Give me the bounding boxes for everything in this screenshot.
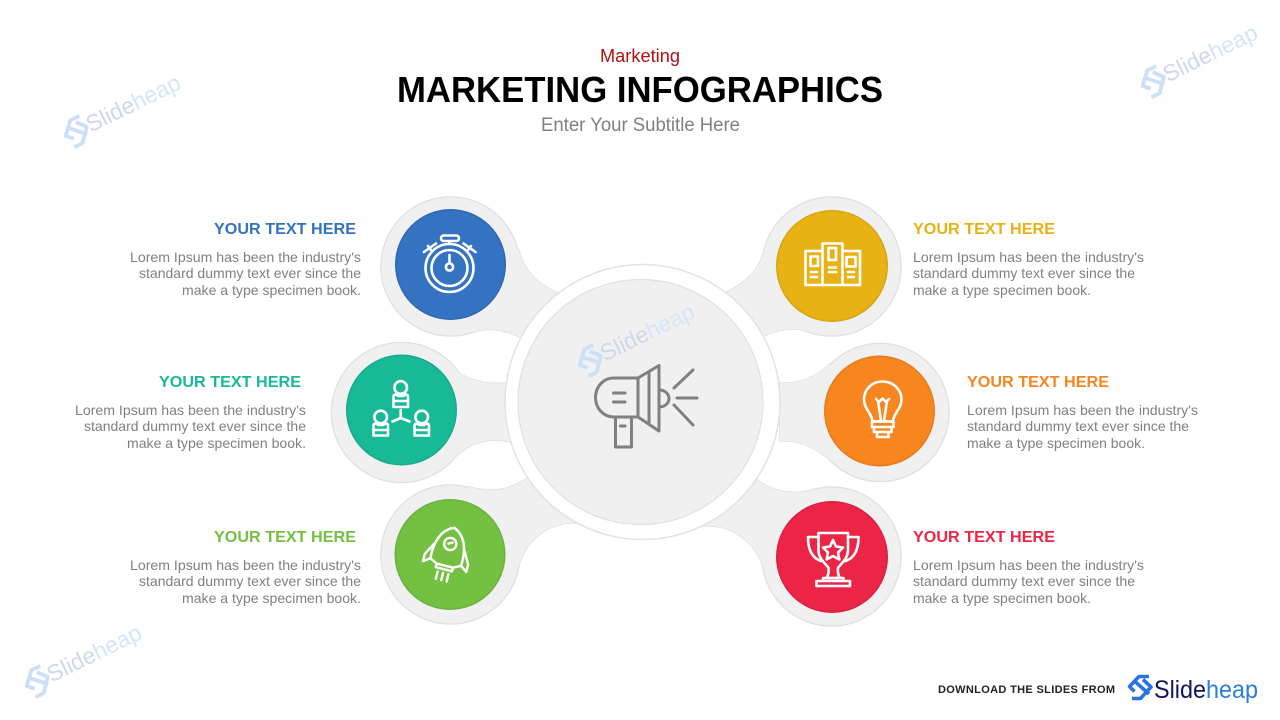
text block: green: Lorem Ipsum has been the industry's	[130, 557, 361, 573]
icon: books	[806, 244, 860, 285]
text block: green: make a type specimen book.	[182, 590, 361, 606]
text block: orange: YOUR TEXT HERE	[967, 374, 1109, 391]
text block: yellow: YOUR TEXT HERE	[913, 221, 1055, 238]
text block: yellow: make a type specimen book.	[913, 282, 1091, 298]
node: red trophy	[703, 480, 901, 626]
watermark: top right: Slideheap	[1159, 19, 1262, 87]
watermark: centre: Slideheap	[596, 298, 699, 366]
text block: yellow: Lorem Ipsum has been the industry's	[913, 249, 1144, 265]
footer: download credit	[938, 676, 1258, 704]
text block: red: standard dummy text ever since the	[913, 573, 1135, 589]
text block: orange: standard dummy text ever since the	[967, 418, 1189, 434]
footer: download credit: Slideheap	[1154, 676, 1258, 704]
icon: light bulb	[864, 382, 902, 437]
text block: orange: Lorem Ipsum has been the industry's	[967, 402, 1198, 418]
text block: teal: Lorem Ipsum has been the industry's	[75, 402, 306, 418]
text block: red	[913, 529, 1144, 606]
text block: green: YOUR TEXT HERE	[214, 529, 356, 546]
footer: download credit: DOWNLOAD THE SLIDES FROM	[938, 684, 1115, 696]
text block: green	[130, 529, 361, 606]
node: blue stopwatch	[381, 197, 557, 338]
text block: yellow	[913, 221, 1144, 298]
text block: blue: YOUR TEXT HERE	[214, 221, 356, 238]
text block: blue: make a type specimen book.	[182, 282, 361, 298]
text block: yellow: standard dummy text ever since the	[913, 265, 1135, 281]
text block: red: Lorem Ipsum has been the industry's	[913, 557, 1144, 573]
node: yellow books	[727, 197, 901, 336]
text block: blue: Lorem Ipsum has been the industry's	[130, 249, 361, 265]
icon: people network	[374, 381, 429, 436]
text block: orange: make a type specimen book.	[967, 435, 1145, 451]
text block: red: make a type specimen book.	[913, 590, 1091, 606]
text block: orange	[967, 374, 1198, 451]
eyebrow label: Marketing	[600, 46, 680, 66]
watermark: bottom left: Slideheap	[43, 619, 146, 687]
text block: green: standard dummy text ever since the	[139, 573, 361, 589]
text block: teal: make a type specimen book.	[127, 435, 306, 451]
text block: blue	[130, 221, 361, 298]
icon: trophy	[808, 533, 858, 586]
text block: teal	[75, 374, 306, 451]
node: teal network	[332, 342, 510, 482]
text block: red: YOUR TEXT HERE	[913, 529, 1055, 546]
text block: teal: YOUR TEXT HERE	[159, 374, 301, 391]
icon: rocket	[420, 522, 476, 585]
title: MARKETING INFOGRAPHICS	[397, 69, 883, 110]
node: green rocket	[381, 477, 575, 624]
hub: central circle	[505, 264, 780, 540]
subtitle: Enter Your Subtitle Here	[541, 115, 740, 136]
node: orange light bulb	[780, 344, 949, 482]
text block: blue: standard dummy text ever since the	[139, 265, 361, 281]
icon: slideheap logo	[1130, 676, 1151, 698]
watermark: top left: Slideheap	[82, 69, 185, 137]
text block: teal: standard dummy text ever since the	[84, 418, 306, 434]
icon: megaphone	[596, 366, 697, 447]
icon: stopwatch	[424, 236, 476, 292]
